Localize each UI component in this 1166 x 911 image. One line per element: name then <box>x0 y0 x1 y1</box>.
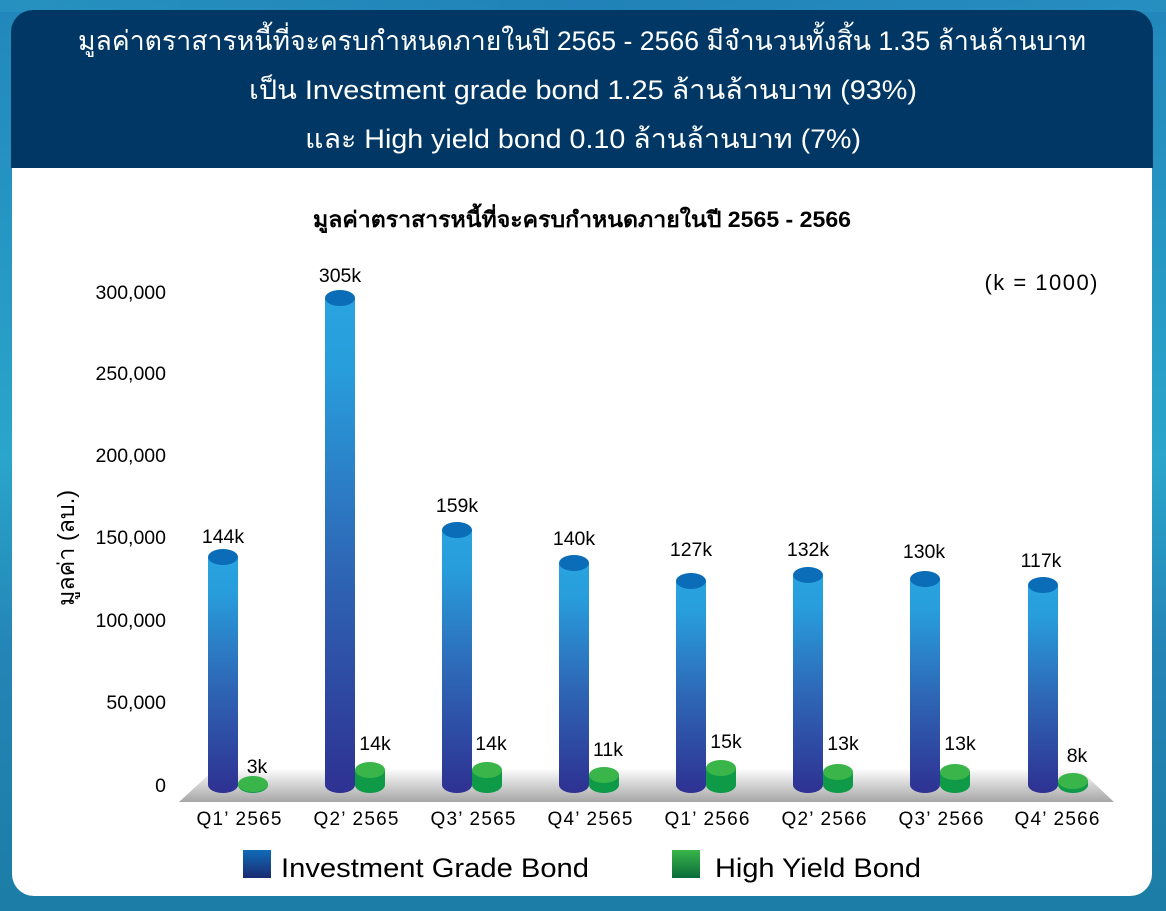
x axis labels: Q4’ 2566 <box>1014 809 1100 830</box>
x axis labels: Q4’ 2565 <box>548 809 632 830</box>
value labels: investment grade: 127k <box>670 539 712 561</box>
value labels: high yield: 14k <box>359 733 391 755</box>
value labels: high yield: 15k <box>710 731 742 753</box>
header text: มูลค่าตราสารหนี้ที่จะครบกำหนดภายในปี 2565 - 2566 มีจำนวนทั้งสิ้น 1.35 ล้านล้านบาท <box>78 21 1086 57</box>
value labels: investment grade: 130k <box>903 541 945 563</box>
value labels: investment grade: 117k <box>1021 550 1062 572</box>
y axis labels: 200,000 <box>96 445 166 467</box>
header text: เป็น Investment grade bond 1.25 ล้านล้านบาท (93%) <box>249 72 917 105</box>
bars: investment grade <box>208 290 1058 793</box>
y axis labels: 300,000 <box>96 282 166 304</box>
panel: header banner <box>11 10 1153 168</box>
chart title: มูลค่าตราสารหนี้ที่จะครบกำหนดภายในปี 2565 - 2566 <box>313 203 851 234</box>
x axis labels: Q3’ 2566 <box>898 809 984 830</box>
value labels: investment grade <box>202 265 1062 572</box>
y axis labels: 150,000 <box>96 527 166 549</box>
y axis labels: 50,000 <box>106 692 166 714</box>
value labels: high yield: 8k <box>1067 745 1088 767</box>
value labels: investment grade: 132k <box>787 539 829 561</box>
unit note: (k = 1000) <box>984 270 1098 295</box>
y axis labels: 0 <box>155 775 166 797</box>
bar chart <box>202 265 1088 793</box>
x axis labels: Q2’ 2566 <box>782 809 866 830</box>
y axis title: มูลค่า (ลบ.) <box>53 490 80 606</box>
y axis labels <box>96 282 166 797</box>
x axis labels: Q2’ 2565 <box>314 809 398 830</box>
value labels: high yield: 14k <box>475 733 507 755</box>
header text: และ High yield bond 0.10 ล้านล้านบาท (7%) <box>305 124 861 154</box>
value labels: investment grade: 144k <box>202 526 244 548</box>
legend <box>243 850 921 883</box>
value labels: high yield: 13k <box>944 733 976 755</box>
y axis labels: 100,000 <box>96 610 166 632</box>
x axis labels: Q1’ 2566 <box>664 809 750 830</box>
value labels: investment grade: 140k <box>553 528 595 550</box>
value labels: high yield: 11k <box>593 739 623 761</box>
value labels: high yield: 3k <box>247 756 268 778</box>
legend: high yield: High Yield Bond <box>715 853 921 883</box>
y axis labels: 250,000 <box>96 363 166 385</box>
value labels: high yield: 13k <box>827 733 859 755</box>
header text <box>78 21 1086 154</box>
legend: investment grade: Investment Grade Bond <box>281 853 589 883</box>
x axis labels: Q3’ 2565 <box>430 809 516 830</box>
chart floor <box>179 768 1114 802</box>
bars: high yield <box>238 760 1088 793</box>
value labels: investment grade: 305k <box>319 265 361 287</box>
value labels: investment grade: 159k <box>436 495 478 517</box>
value labels: high yield <box>247 731 1088 778</box>
x axis labels <box>196 809 1100 830</box>
x axis labels: Q1’ 2565 <box>196 809 282 830</box>
